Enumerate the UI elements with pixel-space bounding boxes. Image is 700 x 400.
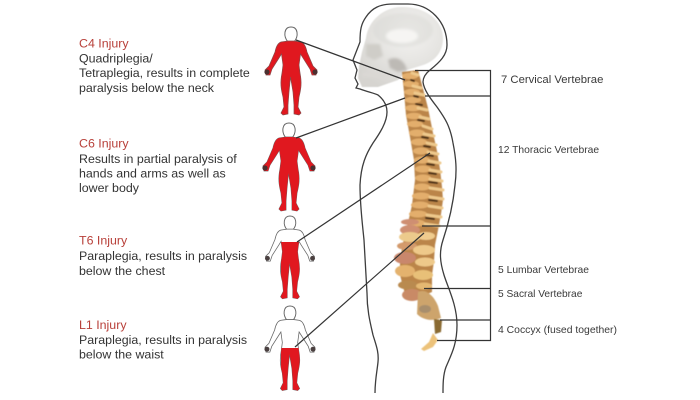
figure: T6 paralysed region xyxy=(281,242,300,299)
text block: T6 injury: Paraplegia, results in paralysis xyxy=(79,249,247,263)
figure: T6 paralysis body xyxy=(265,216,315,299)
leader line: L1 xyxy=(295,233,424,347)
leader line: C4 xyxy=(296,40,405,80)
dark gaps between processes xyxy=(411,80,437,219)
text block: C4 injury: C4 Injury xyxy=(79,36,129,50)
text block: L1 injury: L1 Injury xyxy=(79,318,127,332)
sacrum and coccyx xyxy=(417,291,442,351)
figure: L1 paralysis body xyxy=(264,306,316,390)
spine xyxy=(394,70,443,351)
text block: T6 injury: below the chest xyxy=(79,264,166,278)
text block: C4 injury: Quadriplegia/ xyxy=(79,52,153,66)
label: 5 sacral vertebrae: 5 Sacral Vertebrae xyxy=(498,289,583,300)
label: 4 coccyx: 4 Coccyx (fused together) xyxy=(498,325,617,336)
spinous processes xyxy=(412,73,443,226)
text block: L1 injury xyxy=(79,318,247,362)
text block: C4 injury: Tetraplegia, results in complete xyxy=(79,66,250,80)
text block: C6 injury: lower body xyxy=(79,181,140,195)
vertebral bodies xyxy=(402,73,431,226)
leader line: C6 xyxy=(296,98,405,138)
leader line: T6 xyxy=(297,153,430,242)
text block: C6 injury xyxy=(79,136,237,195)
bracket lines xyxy=(415,70,490,340)
label: 7 cervical vertebrae: 7 Cervical Vertebrae xyxy=(501,74,603,86)
figure: C4 paralysis body xyxy=(264,27,318,115)
text block: C6 injury: C6 Injury xyxy=(79,136,129,150)
text block: C4 injury xyxy=(79,36,250,95)
figure: L1 paralysed region xyxy=(280,344,300,390)
label: 5 lumbar vertebrae: 5 Lumbar Vertebrae xyxy=(498,265,589,276)
body outline xyxy=(353,4,457,393)
text block: T6 injury: T6 Injury xyxy=(79,234,128,248)
text block: L1 injury: Paraplegia, results in paralysis xyxy=(79,333,247,347)
skull xyxy=(358,7,443,87)
lumbar vertebrae xyxy=(394,219,435,301)
text block: L1 injury: below the waist xyxy=(79,348,164,362)
text block: T6 injury xyxy=(79,234,247,278)
text block: C4 injury: paralysis below the neck xyxy=(79,81,215,95)
spine base column xyxy=(400,70,443,298)
text block: C6 injury: Results in partial paralysis of xyxy=(79,152,237,166)
text block: C6 injury: hands and arms as well as xyxy=(79,166,226,180)
label: 12 thoracic vertebrae: 12 Thoracic Vertebrae xyxy=(498,145,599,156)
figure: C6 paralysis body xyxy=(262,123,316,211)
